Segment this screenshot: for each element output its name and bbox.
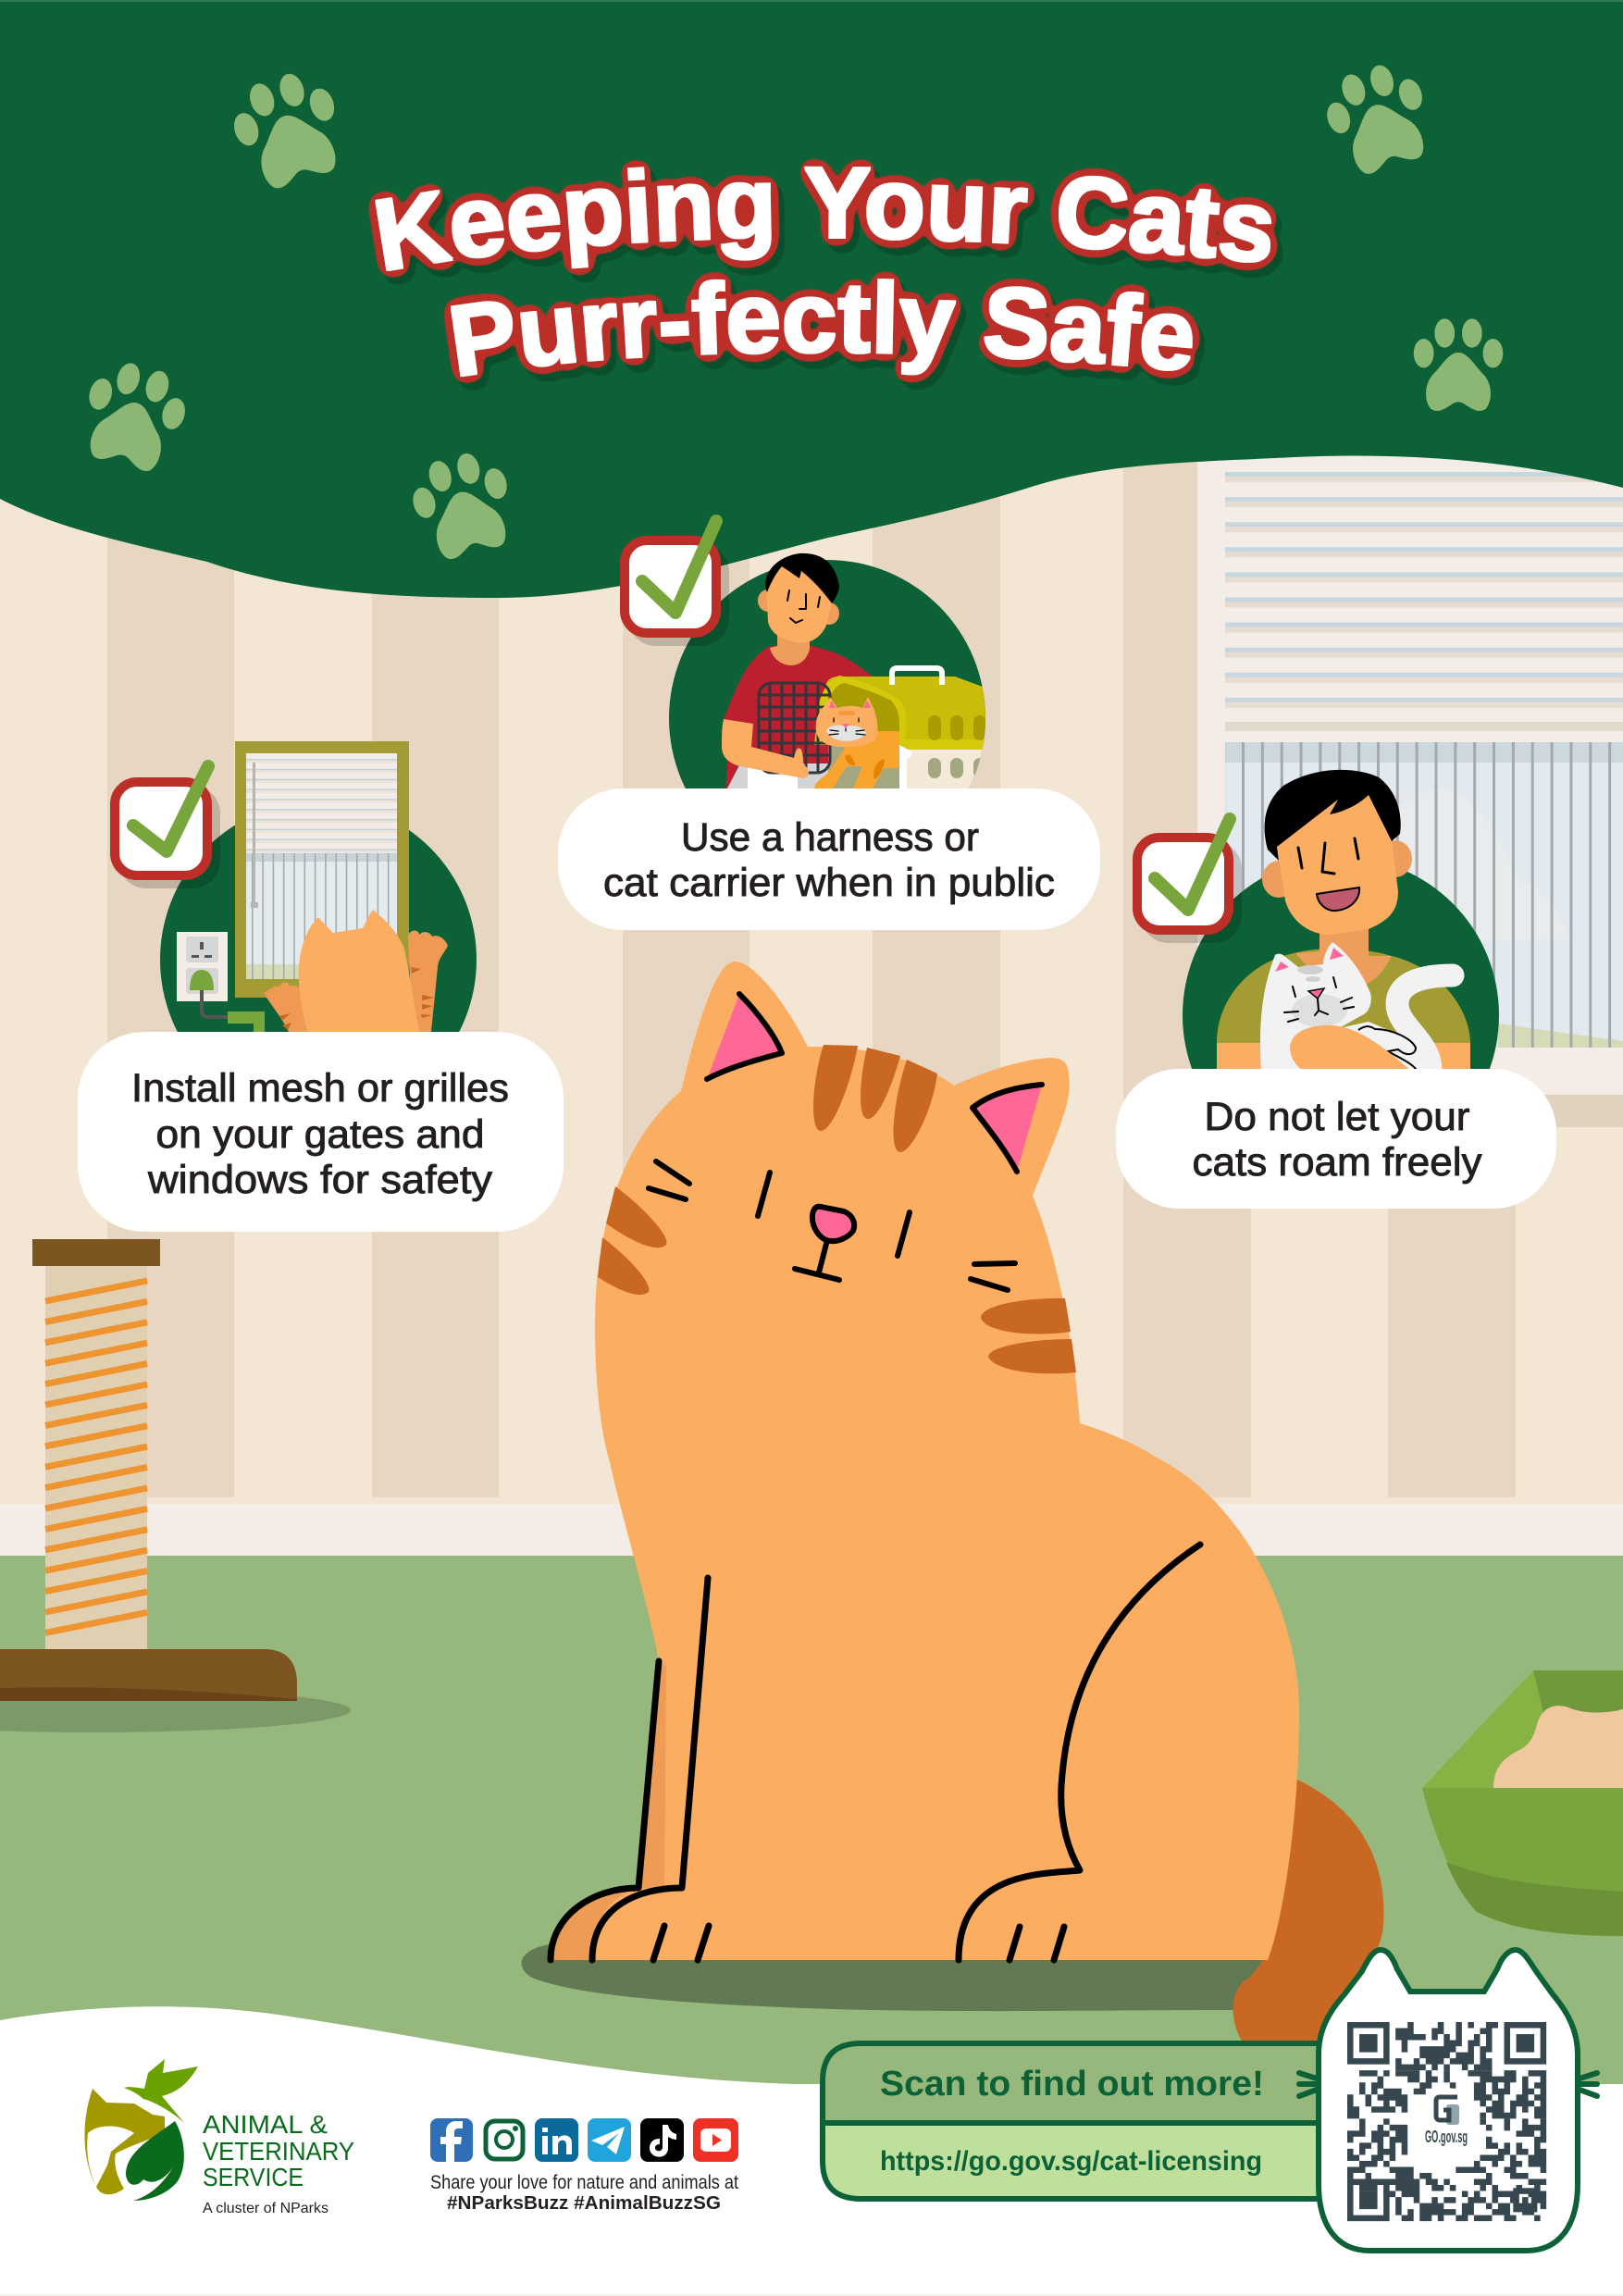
far paw xyxy=(549,1888,638,1960)
man's forearm xyxy=(722,719,809,778)
whiskers xyxy=(1299,2073,1597,2096)
QR cat xyxy=(1299,1950,1597,2251)
cat ears xyxy=(707,997,1042,1172)
bottom edge line xyxy=(0,2294,1623,2296)
logo wordmark: ANIMAL & xyxy=(203,2110,328,2139)
speech bubble: cat carrier when in public xyxy=(603,861,1055,905)
call to action box: Scan to find out more! xyxy=(880,2065,1264,2104)
bottom white band xyxy=(0,2006,1623,2296)
forehead stripes xyxy=(598,1045,1076,1373)
logo wordmark: SERVICE xyxy=(203,2163,304,2191)
man with white cat xyxy=(1217,770,1470,1074)
cat body and head xyxy=(549,962,1299,1960)
large window xyxy=(1197,416,1623,1127)
call to action box: https://go.gov.sg/cat-licensing xyxy=(880,2146,1262,2177)
social media icons xyxy=(430,2118,738,2162)
far leg xyxy=(638,1661,666,1888)
wallpaper stripes xyxy=(107,370,1516,1497)
logo: Animal and Veterinary Service xyxy=(84,2059,354,2216)
icon: linkedin xyxy=(535,2118,578,2162)
green circle backdrop xyxy=(669,560,985,876)
background: wall xyxy=(0,0,1623,1556)
call to action box xyxy=(823,2043,1332,2199)
speech bubble: windows for safety xyxy=(147,1158,493,1202)
GO.gov.sg badge xyxy=(1413,2088,1480,2154)
cat in carrier xyxy=(814,697,899,788)
logo mark xyxy=(84,2059,198,2201)
door grille xyxy=(759,683,830,773)
check box xyxy=(1137,819,1242,943)
logo tagline: A cluster of NParks xyxy=(203,2201,328,2216)
panel: do not let cats roam xyxy=(1116,770,1556,1209)
icon: tiktok xyxy=(640,2118,684,2162)
check box xyxy=(115,766,220,888)
icon: instagram xyxy=(486,2121,523,2159)
logo wordmark xyxy=(203,2110,354,2191)
header: green wave xyxy=(0,0,1623,598)
cat face and body outlines xyxy=(551,994,1200,1960)
green circle backdrop xyxy=(160,801,477,1118)
cat shadow xyxy=(522,1934,1295,2011)
panel: mesh or grilles xyxy=(78,741,564,1232)
speech bubble xyxy=(558,788,1100,930)
panel: harness or carrier xyxy=(558,521,1100,930)
window with blinds xyxy=(235,741,409,998)
green circle backdrop xyxy=(1183,857,1499,1173)
cat climbing, from behind xyxy=(264,910,448,1032)
floor xyxy=(0,1556,1623,2129)
social media caption: #NParksBuzz #AnimalBuzzSG xyxy=(447,2193,721,2214)
speech bubble: cats roam freely xyxy=(1192,1140,1482,1185)
QR code xyxy=(1347,2025,1546,2218)
white cat xyxy=(1260,942,1453,1074)
speech bubble: Use a harness or xyxy=(681,815,979,860)
icon: telegram xyxy=(588,2118,631,2162)
speech bubble xyxy=(1116,1069,1556,1209)
social media caption xyxy=(430,2172,738,2214)
logo wordmark: VETERINARY xyxy=(203,2137,354,2166)
main cat xyxy=(522,962,1383,2045)
scratching post xyxy=(0,1239,351,1732)
pet carrier xyxy=(814,668,990,796)
man xyxy=(724,553,872,796)
title: Keeping Your Cats xyxy=(368,159,1282,285)
speech bubble: Install mesh or grilles xyxy=(131,1066,509,1111)
check box xyxy=(625,521,729,646)
litter box xyxy=(1422,1670,1623,1936)
title xyxy=(368,159,1282,391)
cat tail xyxy=(1233,1779,1383,2045)
GO.gov.sg badge: GO.gov.sg xyxy=(1425,2128,1468,2146)
power socket xyxy=(177,932,265,1032)
title: Purr-fectly Safe xyxy=(444,265,1205,391)
icon: youtube xyxy=(693,2118,738,2162)
paw prints xyxy=(74,56,1503,565)
icon: facebook xyxy=(430,2118,473,2162)
cat-shaped card xyxy=(1319,1950,1578,2251)
social media caption: Share your love for nature and animals at xyxy=(430,2172,738,2193)
speech bubble: Do not let your xyxy=(1205,1095,1469,1139)
speech bubble: on your gates and xyxy=(155,1112,485,1157)
skirting board xyxy=(0,1504,1623,1556)
speech bubble xyxy=(78,1032,564,1232)
